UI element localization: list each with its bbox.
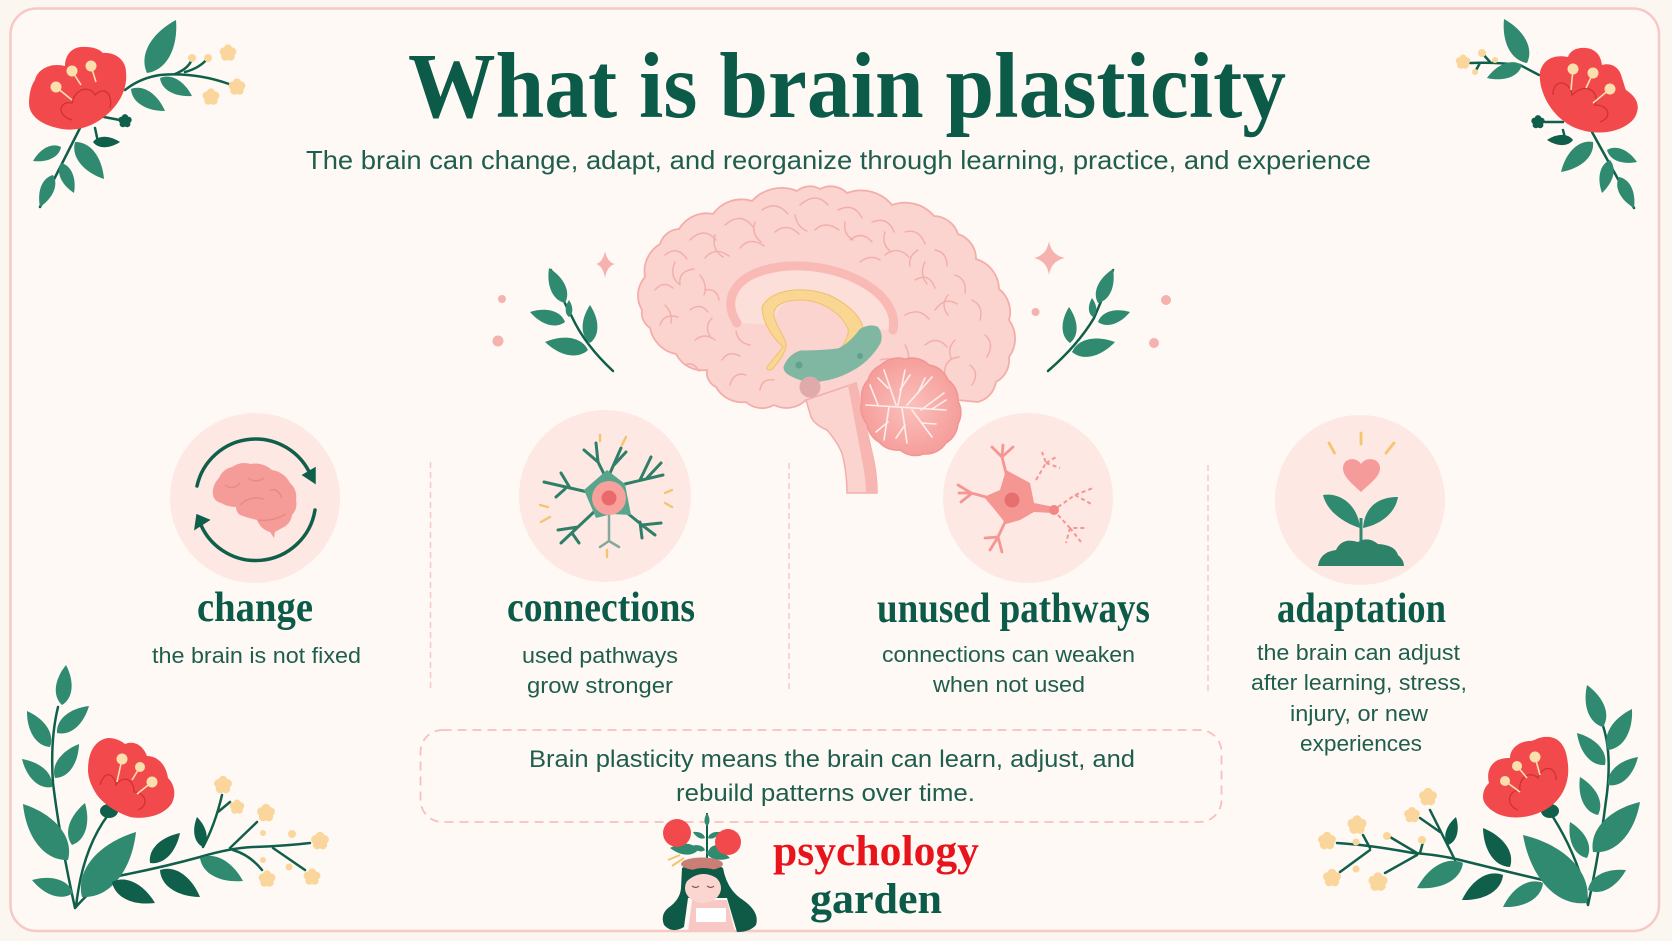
floral corner: top left — [29, 14, 245, 210]
description: unused pathways — [882, 642, 1135, 697]
logo word: garden: garden — [810, 876, 942, 923]
hippocampus green — [785, 327, 880, 380]
corpus callosum — [731, 266, 894, 330]
brain folds — [655, 198, 991, 390]
subtitle: The brain can change, adapt, and reorganize through learning, practice, and experience — [306, 145, 1371, 175]
divider 3 — [1207, 465, 1209, 692]
right laurel sprig — [1048, 266, 1132, 371]
left sparkle and dots — [492, 251, 615, 346]
panel: adaptation — [1251, 415, 1467, 756]
title: What is brain plasticity — [408, 35, 1286, 138]
description: unused pathways: connections can weaken — [882, 642, 1135, 667]
divider 1 — [430, 462, 432, 692]
description: adaptation — [1251, 640, 1467, 756]
brainstem — [806, 383, 877, 493]
description: unused pathways: when not used — [932, 672, 1085, 697]
floral corner: top right — [1456, 15, 1640, 211]
brain outline — [638, 186, 1015, 408]
floral corner: bottom left — [12, 664, 329, 911]
logo: psychology garden — [663, 813, 979, 932]
description: connections: grow stronger — [527, 673, 673, 698]
brain illustration — [638, 186, 1015, 493]
small pink node — [800, 376, 820, 398]
heading: unused pathways: unused pathways — [877, 586, 1150, 632]
brainstem band — [848, 383, 877, 493]
callout: Brain plasticity means the brain can learn, adjust, and — [529, 746, 1135, 773]
description: adaptation: experiences — [1300, 731, 1422, 756]
description: adaptation: injury, or new — [1290, 701, 1428, 726]
panel: unused pathways — [877, 413, 1150, 697]
icon: brain with cycle arrows — [170, 413, 340, 583]
cerebellum — [861, 358, 961, 456]
description: adaptation: after learning, stress, — [1251, 670, 1467, 695]
callout: rebuild patterns over time. — [676, 780, 975, 807]
logo mascot: girl with flowers — [663, 813, 757, 932]
floral corner: bottom right — [1318, 682, 1650, 915]
icon: strong neuron — [519, 410, 691, 582]
panel: connections — [507, 410, 695, 698]
panel: change — [152, 413, 361, 668]
heading: change: change — [197, 585, 313, 631]
left laurel sprig — [528, 265, 613, 371]
description: change: the brain is not fixed — [152, 643, 361, 668]
inner fill — [776, 300, 850, 365]
fornix yellow arc — [762, 290, 863, 370]
heading: connections: connections — [507, 585, 695, 631]
description: adaptation: the brain can adjust — [1257, 640, 1460, 665]
divider 2 — [788, 463, 790, 692]
icon: heart plant — [1275, 415, 1445, 585]
description: connections: used pathways — [522, 643, 678, 668]
heading: adaptation: adaptation — [1277, 586, 1446, 632]
callout — [420, 730, 1222, 822]
logo word: psychology: psychology — [773, 828, 979, 875]
right sparkle and dots — [1032, 241, 1171, 348]
description: connections — [522, 643, 678, 698]
cerebellum branching — [866, 370, 946, 443]
icon: weakening neuron — [943, 413, 1113, 583]
